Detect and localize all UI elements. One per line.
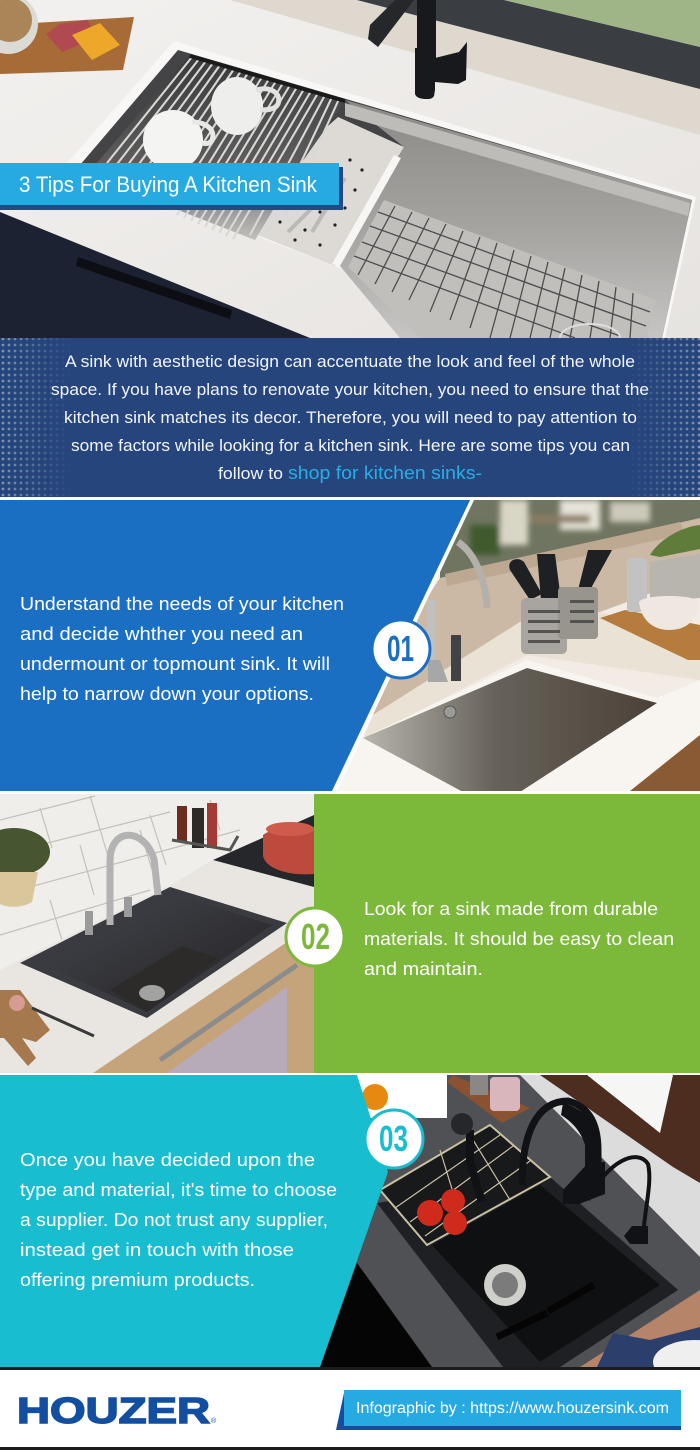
intro text <box>51 353 649 483</box>
intro text: shop for kitchen sinks- <box>288 463 482 483</box>
draining board with holes <box>258 117 404 266</box>
tip 1 text: Understand the needs of your kitchen <box>20 594 344 614</box>
tip 1 panel <box>0 500 474 791</box>
cabinet <box>630 735 700 791</box>
beige wall below window <box>373 518 700 715</box>
footer <box>0 1367 700 1450</box>
intro text: follow to <box>218 465 283 483</box>
cabinet below the counter <box>0 212 310 338</box>
utensil holders <box>509 550 612 654</box>
hero photo: stainless kitchen sink <box>0 0 700 352</box>
tip 1 text <box>20 594 344 704</box>
wooden board, cloth and plate <box>580 1290 700 1367</box>
cutting board with snacks <box>0 0 134 74</box>
logo: HOUZER <box>17 1390 210 1431</box>
badge 03 <box>365 1110 423 1168</box>
tip 3 text <box>20 1150 337 1290</box>
tip 2 text: and maintain. <box>364 959 483 979</box>
tip 3 text: a supplier. Do not trust any supplier, <box>20 1210 328 1230</box>
tip 1 photo: undermount sink <box>330 500 700 792</box>
chrome faucet <box>89 835 158 935</box>
tip 2 text: Look for a sink made from durable <box>364 899 658 919</box>
white cups <box>143 77 279 170</box>
intro text: space. If you have plans to renovate your kitchen, you need to ensure that the <box>51 381 649 399</box>
credit button <box>336 1390 681 1430</box>
window and sill <box>520 1075 700 1257</box>
intro panel <box>0 338 700 497</box>
tip 3 text: type and material, it's time to choose <box>20 1180 337 1200</box>
sink interior <box>80 50 692 338</box>
tip 2 panel <box>314 794 700 1073</box>
sink outer rim <box>67 41 696 340</box>
black sink <box>377 1177 678 1367</box>
logo: ® <box>211 1417 217 1425</box>
credit button: Infographic by : https://www.houzersink.com <box>356 1400 669 1417</box>
black faucets and sprayer <box>451 1101 649 1244</box>
badge 01 <box>372 620 430 678</box>
intro text: A sink with aesthetic design can accentuate the look and feel of the whole <box>65 353 635 371</box>
badge 02 <box>286 908 344 966</box>
tip 1 text: help to narrow down your options. <box>20 684 314 704</box>
tip 3 photo: black granite sink <box>320 1075 700 1384</box>
tip 3 text: instead get in touch with those <box>20 1240 294 1260</box>
black faucet <box>368 0 467 99</box>
black bottom-left corner <box>320 1263 432 1367</box>
roll-up drying rack <box>95 55 345 240</box>
front countertop <box>330 660 700 791</box>
tip 3 panel <box>0 1075 388 1367</box>
tip 3 text: offering premium products. <box>20 1270 255 1290</box>
dark sink <box>20 887 287 1018</box>
marble countertop <box>0 939 62 976</box>
back of countertop <box>363 612 700 740</box>
intro text: some factors while looking for a kitchen sink. Here are some tips you can <box>71 437 630 455</box>
badge 03: 03 <box>379 1118 408 1159</box>
window sill and frame <box>230 0 700 135</box>
wire basket with tomatoes <box>380 1125 550 1245</box>
chrome faucet <box>428 542 487 682</box>
wooden cabinet and curtain <box>93 940 314 1073</box>
tip 2 text <box>364 899 674 979</box>
subway tile wall <box>0 796 240 940</box>
tip 2 photo: dark topmount sink <box>0 794 314 1073</box>
title banner <box>0 163 343 210</box>
potted plant <box>0 828 50 907</box>
white cutout with orange icon <box>350 1075 447 1118</box>
spice rack <box>172 803 238 850</box>
badge 01: 01 <box>387 628 414 669</box>
tip 2 text: materials. It should be easy to clean <box>364 929 674 949</box>
window view <box>440 500 700 580</box>
stove and pot <box>213 815 314 887</box>
tip 1 text: and decide whther you need an <box>20 624 303 644</box>
intro text: kitchen sink matches its decor. Therefore, you will need to pay attention to <box>64 409 637 427</box>
tip 1 text: undermount or topmount sink. It will <box>20 654 330 674</box>
tip 3 text: Once you have decided upon the <box>20 1150 315 1170</box>
title text: 3 Tips For Buying A Kitchen Sink <box>19 172 318 197</box>
chopping board <box>0 990 94 1066</box>
tray with jars <box>447 1075 530 1123</box>
right basin <box>340 100 692 352</box>
badge 02: 02 <box>301 916 330 957</box>
sink basin <box>363 668 657 792</box>
cutting board and bowl <box>600 525 700 660</box>
